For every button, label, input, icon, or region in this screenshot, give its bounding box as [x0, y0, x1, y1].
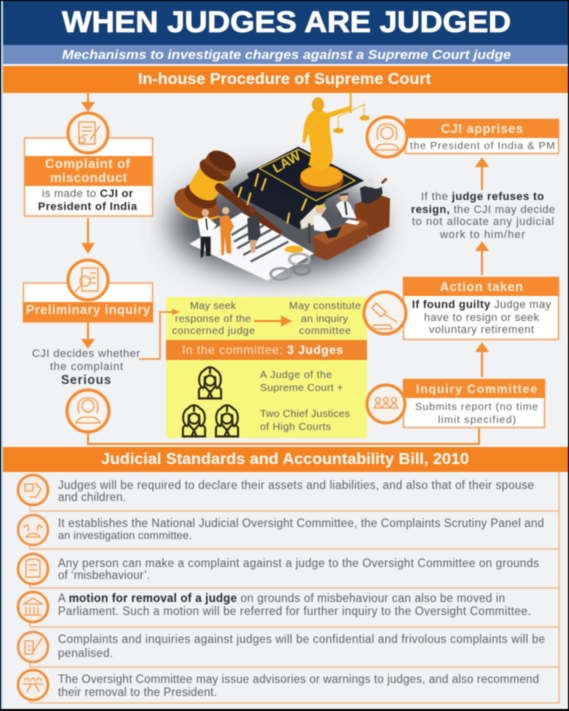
text: may seek response: May seek: [190, 300, 237, 312]
icon: magnifier on document: [68, 260, 108, 300]
text: may constitute: [289, 300, 361, 337]
panel: action taken: have to resign or seek: [424, 312, 540, 324]
icon: complaint document: [68, 113, 108, 153]
connector: serious to inquiry committee: [88, 428, 479, 444]
arrow: seek to constitute: [254, 317, 290, 325]
panel: action taken: If found guilty Judge may: [412, 299, 552, 311]
text: two chief justices: Two Chief Justices: [260, 408, 350, 420]
panel: preliminary inquiry: [23, 283, 153, 322]
arrow: refusal to apprises: [477, 159, 487, 190]
bill point 6: advisories: their removal to the President.: [58, 687, 217, 699]
bill point 4: motion for removal: [18, 592, 531, 622]
text: judge refuses to resign: work to him/her: [439, 229, 525, 241]
panel: preliminary inquiry: Preliminary inquiry: [26, 303, 150, 317]
committee band: [166, 340, 367, 360]
bill point 1: assets: Judges will be required to declare their assets and liabilities, and also that of their spouse: [58, 480, 534, 492]
icon: parliament: [18, 592, 48, 622]
panel: committee in yellow: [166, 297, 367, 438]
text: judge refuses to resign: to not allocate any judicial: [412, 216, 554, 228]
bill point 5: confidential: [18, 632, 545, 662]
illustration: gavel, law books, statue of justice, courtroom: [169, 93, 390, 281]
panel: complaint of misconduct: is made to CJI or: [42, 188, 134, 200]
heading: judicial standards bill: Judicial Standards and Accountability Bill, 2010: [101, 451, 469, 468]
icon: supreme court judge: [199, 367, 221, 398]
icon: CJI: [367, 117, 407, 157]
bill point 3: any person: of ‘misbehaviour’.: [58, 570, 150, 582]
icon: chief justice two: [216, 405, 238, 436]
subtitle banner: [3, 45, 568, 64]
icon: committee: [367, 385, 405, 423]
panel: inquiry committee: Submits report (no time: [415, 401, 538, 413]
text: may constitute: May constitute: [289, 300, 361, 312]
text: may seek response: concerned judge: [172, 325, 255, 337]
arrow: to complaint: [83, 93, 93, 110]
text: CJI decides: Serious: [61, 373, 111, 387]
paper with stripes: [189, 213, 314, 281]
arrow: decision to committee: [139, 310, 178, 359]
text: may seek response: response of the: [175, 313, 251, 325]
title banner: [3, 1, 568, 45]
title banner: WHEN JUDGES ARE JUDGED: [62, 6, 511, 39]
heading: judicial standards bill: [3, 447, 568, 472]
bill point 1: assets: [18, 475, 534, 505]
bill point 4: motion for removal: A motion for removal of a judge on grounds of misbehaviour can also be moved in: [58, 593, 505, 605]
panel: action taken: [403, 277, 559, 340]
arrow: complaint to inquiry: [83, 218, 93, 252]
bill point 3: any person: Any person can make a complaint against a judge to the Oversight Committee on grounds: [58, 558, 539, 570]
text: CJI decides: the complaint: [50, 361, 123, 373]
bill point 5: confidential: penalised.: [58, 648, 113, 660]
text: judge of supreme court: A Judge of the: [260, 369, 332, 381]
law books: [233, 147, 364, 229]
panel: complaint of misconduct: Complaint of: [45, 156, 131, 171]
text: CJI decides: CJI decides whether: [32, 348, 140, 360]
bill point 2: oversight committee: It establishes the National Judicial Oversight Committee, the Complaints Scrutiny Panel and: [58, 518, 544, 530]
icon: chief justice one: [183, 405, 205, 436]
panel: inquiry committee: limit specified): [438, 414, 516, 426]
gavel: [169, 146, 277, 233]
text: judge refuses to resign: [411, 191, 555, 241]
text: CJI decides: [32, 348, 140, 387]
bill point 1: assets: and children.: [58, 492, 126, 504]
bill point 2: oversight committee: an investigation committee.: [58, 530, 192, 542]
text: judge of supreme court: Supreme Court +: [260, 382, 343, 394]
three standing figures: [198, 206, 261, 258]
icon: oversight committee: [18, 515, 48, 545]
statue of justice: [300, 93, 370, 192]
panel: complaint of misconduct: [24, 138, 152, 216]
bill point 3: any person: [18, 554, 539, 584]
arrow: inquiry to decision: [83, 322, 93, 347]
panel: action taken: voluntary retirement: [429, 324, 534, 336]
bill point 6: advisories: [18, 670, 539, 700]
icon: assets: [18, 475, 48, 505]
text: judge of supreme court: [260, 369, 343, 394]
subtitle banner: Mechanisms to investigate charges against a Supreme Court judge: [62, 48, 511, 62]
panel: complaint of misconduct: misconduct: [50, 170, 128, 185]
text: may constitute: an inquiry: [301, 313, 349, 325]
text: two chief justices: of High Courts: [260, 421, 331, 433]
icon: serious judge: [67, 390, 109, 432]
panel: complaint of misconduct: President of India: [38, 201, 138, 213]
icon: oversight table: [18, 670, 48, 700]
bill point 6: advisories: The Oversight Committee may issue advisories or warnings to judges, and also recommend: [58, 674, 539, 686]
text: two chief justices: [260, 408, 350, 433]
courtroom desks and officials: [309, 178, 390, 261]
text: judge refuses to resign: If the judge refuses to: [421, 191, 544, 203]
text: may constitute: committee: [299, 325, 351, 337]
text: may seek response: [172, 300, 255, 337]
arrow: action to refusal: [477, 243, 487, 275]
handcuffs: [271, 254, 310, 280]
panel: CJI apprises: [405, 119, 559, 154]
committee band: In the committee: 3 Judges: [182, 343, 343, 357]
icon: person: [18, 554, 48, 584]
bill point 2: oversight committee: [18, 515, 544, 545]
panel: inquiry committee: [403, 379, 545, 428]
law books: LAW: [270, 148, 303, 176]
panel: inquiry committee: Inquiry Committee: [416, 382, 537, 396]
bill point 4: motion for removal: Parliament. Such a motion will be referred for further inquiry to the Oversight Committee.: [58, 606, 531, 618]
panel: CJI apprises: CJI apprises: [441, 122, 523, 136]
heading: in-house procedure: [3, 66, 568, 93]
icon: confidential note: [18, 632, 48, 662]
text: judge refuses to resign: resign, the CJI may decide: [411, 204, 555, 216]
panel: CJI apprises: the President of India & PM: [410, 140, 555, 152]
heading: in-house procedure: In-house Procedure of Supreme Court: [138, 71, 432, 88]
row frame lines: [30, 472, 559, 703]
arrow: report to action: [477, 344, 487, 377]
bill point 5: confidential: Complaints and inquiries against judges will be confidential and frivolous complaints will be: [58, 634, 545, 646]
icon: gavel: [364, 292, 406, 334]
panel: action taken: Action taken: [440, 280, 523, 294]
